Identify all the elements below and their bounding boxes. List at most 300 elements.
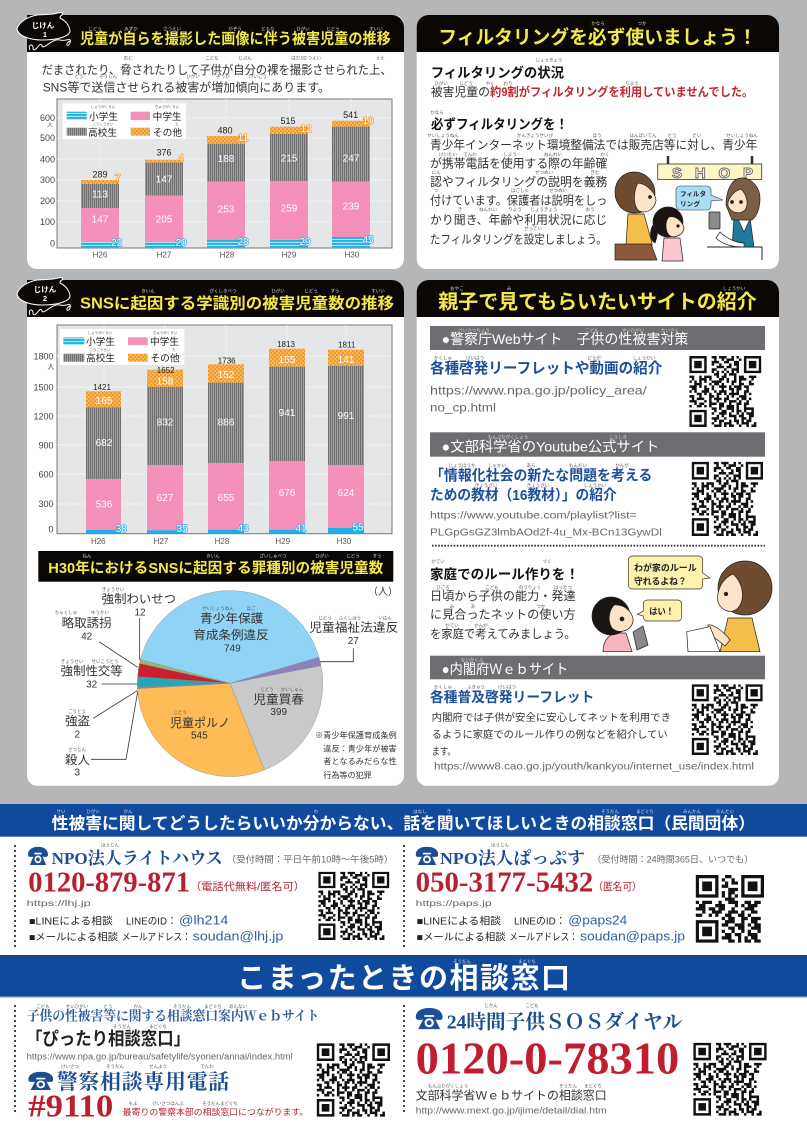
value labels: 259: [281, 204, 298, 214]
text block: be sure to filter: かなら: [430, 109, 444, 116]
legend: しょうがくせい: [88, 330, 113, 336]
section: MEXT YouTube: https://www.youtube.com/playlist?list=: [430, 509, 637, 521]
value labels: 20: [175, 238, 187, 249]
value labels: H28: [215, 537, 230, 546]
text block: be sure to filter: はんばいてん: [630, 132, 657, 139]
section: Cabinet Office: ●内閣府Ｗｅｂサイト: [442, 661, 568, 677]
value labels: H29: [275, 537, 291, 546]
contact: Lighthouse: [27, 842, 393, 944]
heading bar: H30 by crime type: ひがい: [315, 552, 329, 560]
text block: filtering status: 約9割がフィルタリングを利用していませんでした。: [490, 84, 753, 99]
pie chart: victims by crime type: じどう: [173, 709, 187, 716]
band: private consultation: き: [447, 809, 451, 815]
value labels: H30: [345, 250, 360, 260]
bars H26: [81, 180, 119, 248]
band: private consultation: みんかん: [683, 808, 701, 815]
contact: Lighthouse: https://lhj.jp: [27, 898, 91, 908]
pie chart: victims by crime type: 3: [75, 768, 81, 778]
icon: case 2 badge: [17, 278, 70, 315]
heading bar: self-taken images: じどう: [88, 26, 102, 32]
text block: filtering status: [431, 58, 753, 99]
icon: case 2 badge: 2: [43, 294, 47, 303]
value labels: 7: [115, 174, 121, 184]
value labels: 1421: [93, 383, 111, 392]
pie chart: victims by crime type: 青少年保護: [200, 610, 263, 626]
bar chart: self-taken images: 人: [47, 122, 53, 129]
text block: household rules: に見合ったネットの使い方: [430, 607, 576, 622]
pie chart: victims by crime type: ちゃくしゅ: [55, 610, 77, 616]
value labels: 515: [280, 116, 296, 126]
speech bubble: yes: はい！: [649, 606, 674, 616]
heading bar: recommended sites: おやこ: [450, 285, 464, 292]
bar chart: self-taken images: [40, 99, 392, 260]
pie chart: victims by crime type: ふくしほう: [339, 616, 361, 622]
section: National Police Agency: けいさつちょう: [458, 327, 490, 334]
bars H30: [332, 121, 370, 248]
contact: Pittari and police line: まどぐち: [204, 1003, 222, 1010]
text block: filtering status: 被害児童の: [431, 85, 490, 99]
clerk: [709, 178, 760, 247]
legend: ちゅうがくせい: [155, 104, 180, 110]
pie chart: victims by crime type: かいしゅん: [281, 686, 304, 693]
value labels: 991: [338, 411, 355, 422]
QR code: [692, 684, 763, 755]
bars H29: [269, 349, 305, 534]
section: National Police Agency: https://www.npa.go.jp/policy_area/: [430, 384, 647, 398]
QR code: [693, 1043, 767, 1116]
text block: household rules: [430, 558, 579, 641]
pie chart: victims by crime type: 強制性交等: [61, 664, 123, 678]
icon: telephone: [416, 847, 438, 865]
text block: be sure to filter: おう: [586, 206, 594, 213]
heading bar: H30 by crime type: H30年におけるSNSに起因する罪種別の被害児童数: [48, 559, 384, 577]
contact: 24-hour SOS dial: 24時間子供ＳＯＳダイヤル: [447, 1009, 682, 1033]
legend: ちゅうがくせい: [153, 330, 178, 336]
text block: be sure to filter: とう: [668, 133, 676, 139]
pie chart: victims by crime type: 42: [81, 632, 93, 642]
section: National Police Agency: ●警察庁Webサイト 子供の性被害対策: [442, 331, 688, 347]
text block: be sure to filter: かんきょうせいび: [517, 132, 553, 139]
contact: Lighthouse: LINEのID：: [126, 916, 177, 927]
speech bubble: filtering: [676, 186, 723, 210]
text block: be sure to filter: が携帯電話を使用する際の年齢確: [430, 155, 607, 170]
text block: note: ※青少年保護育成条例: [315, 730, 397, 740]
text block: be sure to filter: じょうきょう: [530, 207, 558, 213]
text block: note: 行為等の犯罪: [323, 770, 372, 780]
pie chart: victims by crime type: ほご: [246, 605, 256, 612]
contact: Lighthouse: （電話代無料/匿名可）: [190, 880, 305, 893]
contact: PAPS: soudan@paps.jp: [580, 930, 685, 944]
illustration: parent and child talking: [592, 556, 772, 652]
legend: その他: [153, 127, 182, 139]
legend: こうこうせい: [92, 122, 114, 128]
contact: 24-hour SOS dial: 0120-0-78310: [416, 1032, 679, 1083]
bar chart: self-taken images: 400: [40, 154, 55, 164]
heading bar: H30 by crime type: ねん: [82, 554, 92, 560]
contact: Pittari and police line: せいひがい: [66, 1003, 89, 1010]
pie chart: victims by crime type: 殺人: [65, 752, 90, 767]
section: Cabinet Office: 内閣府では子供が安全に安心してネットを利用でき: [432, 711, 671, 724]
legend: その他: [150, 352, 180, 364]
QR code: [696, 875, 764, 943]
contact: Pittari and police line: せんよう: [149, 1064, 167, 1070]
section: Cabinet Office: 各種普及啓発リーフレット: [430, 689, 594, 705]
text block: household rules: こども: [485, 584, 499, 591]
text block: be sure to filter: 付けています。保護者は説明をしっ: [430, 193, 607, 208]
value labels: 113: [92, 190, 108, 200]
value labels: 239: [343, 202, 360, 212]
heading bar: SNS victims by school level: じどう: [304, 288, 318, 294]
band: private consultation: はなし: [413, 808, 427, 815]
panel: self-taken images trend: [17, 13, 404, 269]
section: National Police Agency: こども: [585, 327, 599, 334]
value labels: H27: [154, 537, 169, 546]
icon: case 1 badge: 1: [43, 30, 47, 39]
text block: be sure to filter: でんわ: [463, 151, 477, 158]
icon: case 2 badge: じけん: [34, 285, 57, 294]
contact: Lighthouse: ■LINEによる相談: [29, 914, 113, 927]
value labels: 28: [237, 237, 249, 248]
contact: 24-hour SOS dial: もんぶかがくしょう: [428, 1082, 468, 1090]
value labels: 1811: [338, 341, 356, 350]
text block: household rules: かんが: [474, 622, 488, 629]
value labels: H26: [91, 537, 106, 546]
text block: intro: とう: [74, 74, 84, 80]
contact: Pittari and police line: もよ: [128, 1101, 138, 1107]
section: MEXT YouTube: かんが: [615, 462, 629, 469]
contact: Lighthouse: 0120-879-871: [28, 868, 190, 899]
pie chart: victims by crime type: きょうせい: [102, 587, 125, 593]
section: Cabinet Office: ふきゅう: [467, 684, 485, 690]
band: when in trouble: まどぐち: [518, 958, 536, 965]
heading bar: self-taken images: すいい: [369, 26, 383, 32]
paper: [687, 627, 720, 652]
contact: Pittari and police line: 子供の性被害等に関する相談窓口案内Ｗｅｂサイト: [27, 1008, 319, 1024]
legend: 高校生: [88, 127, 117, 139]
value labels: 155: [279, 355, 296, 366]
value labels: 11: [238, 133, 249, 144]
icon: telephone: [28, 1072, 53, 1090]
mother: [708, 561, 772, 652]
contact: 24-hour SOS dial: [416, 1002, 767, 1116]
text block: intro: うえ: [376, 56, 385, 62]
bars H27: [145, 160, 183, 248]
text block: be sure to filter: たフィルタリングを設定しましょう。: [430, 232, 607, 246]
value labels: 1652: [157, 366, 175, 375]
contact: PAPS: ■LINEによる相談: [417, 914, 501, 927]
text block: be sure to filter: けいたい: [439, 152, 457, 158]
text block: be sure to filter: つ: [434, 188, 439, 194]
value labels: 29: [299, 237, 311, 248]
pie chart: victims by crime type: 児童買春: [253, 692, 304, 706]
text block: be sure to filter: ねんれい: [544, 152, 562, 158]
section: MEXT YouTube: ための教材（16教材）」の紹介: [430, 487, 617, 504]
speech bubble: filtering: フィルタ: [680, 189, 706, 198]
value labels: 480: [217, 126, 233, 136]
heading bar: self-taken images: ともな: [261, 26, 275, 32]
heading bar: filtering: フィルタリングを必ず使いましょう！: [438, 26, 757, 48]
contact: Lighthouse: @lh214: [179, 913, 228, 927]
value labels: 43: [237, 524, 249, 534]
QR code: [692, 462, 763, 536]
value labels: 253: [218, 204, 235, 216]
heading bar: filtering: [417, 15, 779, 52]
value labels: 141: [338, 355, 355, 366]
section: National Police Agency: no_cp.html: [430, 401, 496, 415]
contact: 24-hour SOS dial: http://www.mext.go.jp/ijime/detail/dial.htm: [416, 1106, 607, 1116]
contact: Lighthouse: ほうじん: [101, 842, 119, 848]
heading bar: filtering: つか: [638, 20, 647, 27]
section: MEXT YouTube: しゃかい: [488, 462, 506, 469]
text block: household rules: づく: [542, 558, 552, 565]
icon: case 1 badge: じけん: [32, 21, 55, 30]
section: MEXT YouTube: きょうざい: [527, 482, 550, 489]
section: Cabinet Office: るように家庭でのルール作りの例などを紹介してい: [432, 728, 668, 741]
contact: Lighthouse: NPO法人ライトハウス: [52, 849, 223, 868]
text block: intro: だまされたり、脅されたりして子供が自分の裸を撮影させられた上、: [42, 62, 392, 77]
bar chart: self-taken images: 100: [40, 217, 55, 227]
bar chart: self-taken images: 0: [50, 238, 55, 248]
value labels: 682: [96, 438, 113, 449]
heading bar: SNS victims by school level: ひがい: [271, 288, 285, 294]
bars H29: [270, 127, 308, 248]
section: MEXT YouTube: こうしき: [609, 434, 627, 440]
heading bar: H30 by crime type: じどう: [346, 552, 360, 560]
contact: Pittari and police line: そうだん: [173, 1003, 191, 1010]
text block: intro: おど: [124, 54, 133, 62]
pie chart: victims by crime type: いはん: [378, 616, 392, 622]
value labels: [91, 340, 364, 546]
band: private consultation: わ: [314, 808, 319, 815]
text block: note: 者となるみだらな性: [323, 756, 397, 766]
bar chart: SNS victims by school level: 300: [38, 499, 54, 509]
bar chart: self-taken images: 300: [40, 175, 55, 185]
heading bar: SNS victims by school level: すいい: [371, 288, 385, 294]
legend: [63, 103, 186, 139]
pie chart: victims by crime type: 749: [224, 644, 241, 654]
value labels: 38: [116, 524, 127, 535]
value labels: 832: [157, 418, 174, 428]
heading bar: H30 by crime type: ざいしゅべつ: [260, 552, 287, 560]
pie chart: victims by crime type: じどう: [260, 686, 274, 693]
heading bar: self-taken images: ひがい: [296, 26, 310, 32]
legend: こうこうせい: [90, 347, 111, 353]
text block: household rules: を家庭で考えてみましょう。: [430, 627, 576, 641]
pie chart: victims by crime type: 545: [191, 730, 208, 742]
bar chart: self-taken images: 500: [40, 133, 55, 143]
text block: be sure to filter: たい: [692, 133, 702, 139]
pie chart: victims by crime type: 児童ポルノ: [170, 716, 230, 730]
contact: 24-hour SOS dial: まどぐち: [584, 1082, 602, 1090]
pie chart: victims by crime type: じどう: [318, 614, 332, 622]
value labels: 45: [362, 235, 374, 246]
contact: 24-hour SOS dial: こども: [525, 1002, 539, 1009]
text block: be sure to filter: 青少年インターネット環境整備法では販売店等に対し、青少年: [430, 137, 757, 152]
legend: 小学生: [86, 336, 115, 348]
text block: intro: こども: [205, 54, 219, 62]
text block: household rules: あ: [471, 604, 476, 610]
pie chart: victims by crime type: 強制わいせつ: [102, 592, 176, 606]
heading bar: SNS victims by school level: [27, 280, 404, 317]
icon: telephone: [416, 1008, 443, 1029]
pie chart: victims by crime type: せいこうとう: [92, 659, 118, 665]
value labels: 10: [362, 116, 374, 127]
value labels: 289: [92, 170, 108, 180]
value labels: 147: [92, 214, 109, 226]
value labels: 655: [218, 493, 235, 504]
pie chart: victims by crime type: 12: [134, 608, 146, 618]
section: National Police Agency: どうが: [587, 354, 601, 362]
text block: intro: けいこう: [249, 74, 267, 80]
text block: household rules: のうりょく: [519, 585, 541, 591]
contact: Pittari and police line: こども: [36, 1003, 50, 1010]
value labels: 627: [157, 493, 174, 504]
text block: be sure to filter: せいしょうねん: [726, 133, 758, 139]
contact: Pittari and police line: [26, 1003, 390, 1124]
contact: PAPS: メールアドレス：: [509, 933, 578, 944]
QR code: [318, 872, 389, 940]
text block: household rules: かてい: [431, 558, 445, 565]
section: MEXT YouTube: じょうほうか: [448, 462, 476, 469]
section: National Police Agency: [430, 326, 765, 427]
heading bar: filtering: かなら: [591, 20, 605, 27]
band: private consultation: そうだん: [601, 808, 619, 815]
value labels: H27: [157, 250, 172, 260]
icon: telephone: [28, 847, 48, 865]
heading bar: SNS victims by school level: がくしきべつ: [210, 288, 237, 294]
contact: PAPS: @paps24: [568, 913, 627, 927]
text block: filtering status: りよう: [625, 81, 639, 87]
pie chart: victims by crime type: きょうせい: [61, 659, 84, 665]
text block: intro: さつえい: [303, 54, 321, 62]
heading bar: H30 by crime type: すう: [372, 552, 382, 560]
section: Cabinet Office: けいはつ: [498, 684, 516, 690]
section: National Police Agency: せいひがい: [622, 327, 645, 334]
value labels: [92, 110, 374, 260]
contact: Lighthouse: soudan@lhj.jp: [193, 930, 283, 944]
text block: be sure to filter: 必ずフィルタリングを！: [431, 116, 568, 132]
section: MEXT YouTube: [430, 432, 765, 539]
contact: PAPS: 050-3177-5432: [416, 868, 593, 899]
speech bubble: filtering: リング: [680, 199, 701, 208]
section: Cabinet Office: [430, 656, 765, 772]
speech bubble: yes: [637, 600, 682, 621]
girl: [651, 207, 684, 261]
section: National Police Agency: けいはつ: [466, 356, 484, 362]
text block: be sure to filter: かく: [600, 151, 610, 158]
contact: Pittari and police line: 「ぴったり相談窓口」: [26, 1029, 190, 1049]
legend: 中学生: [153, 111, 182, 123]
value labels: 215: [281, 154, 298, 164]
text block: be sure to filter: 認やフィルタリングの説明を義務: [430, 174, 607, 189]
contact: PAPS: ■メールによる相談: [417, 931, 506, 944]
heading bar: self-taken images: [27, 15, 404, 52]
section: National Police Agency: かくしゅ: [434, 354, 452, 362]
section: National Police Agency: たいさく: [661, 327, 679, 334]
band: private consultation: かん: [124, 808, 133, 815]
contact: PAPS: LINEのID：: [514, 916, 566, 927]
value labels: H28: [220, 250, 235, 260]
value labels: 41: [295, 524, 307, 534]
contact: Pittari and police line: #9110: [28, 1088, 113, 1124]
value labels: 941: [279, 408, 296, 419]
text block: intro: SNS等で送信させられる被害が増加傾向にあります。: [43, 80, 330, 94]
contact: Pittari and police line: そうだんまどぐち: [202, 1100, 238, 1107]
band: private consultation: 性被害に関してどうしたらいいか分からない、話を聞いてほしいときの相談窓口（民間団体）: [52, 814, 755, 833]
text block: note: [315, 730, 397, 780]
bar chart: SNS victims by school level: [33, 325, 392, 546]
text block: be sure to filter: りよう: [508, 207, 522, 213]
legend: しょうがくせい: [91, 104, 116, 110]
QR code: [689, 356, 761, 427]
section: National Police Agency: しょうかい: [633, 354, 656, 362]
heading bar: recommended sites: しょうかい: [723, 285, 746, 292]
speech bubble: house rules: わが家のルール: [634, 562, 697, 573]
contact: PAPS: ほうじん: [491, 842, 509, 848]
legend: 高校生: [86, 352, 115, 364]
heading bar: H30 by crime type: きいん: [206, 554, 220, 560]
text block: be sure to filter: かり聞き、年齢や利用状況に応じ: [430, 212, 607, 227]
speech bubble: house rules: [628, 556, 710, 589]
pie chart: victims by crime type: 育成条例違反: [193, 627, 269, 642]
text block: filtering status: やく: [486, 80, 494, 87]
contact: Pittari and police line: そうだん: [113, 1023, 131, 1030]
heading bar: H30 by crime type: [38, 551, 393, 582]
text block: household rules: 日頃から子供の能力・発達: [430, 589, 576, 603]
section: MEXT YouTube: 「情報化社会の新たな問題を考える: [430, 466, 652, 484]
illustration: shop filtering explanation: SHOP: [672, 165, 753, 182]
QR code: [317, 1043, 390, 1117]
value labels: H30: [337, 537, 352, 546]
heading bar: self-taken images: みずか: [124, 26, 138, 32]
contact: PAPS: （受付時間：24時間365日、いつでも）: [592, 853, 753, 864]
pie chart: victims by crime type: 2: [75, 730, 81, 740]
value labels: 541: [343, 110, 358, 120]
child: [592, 597, 648, 652]
contact: Pittari and police line: まどぐち: [149, 1023, 167, 1030]
value labels: 4: [178, 154, 184, 164]
band: when in trouble: そうだん: [453, 958, 471, 965]
value labels: 886: [218, 418, 235, 428]
band: private consultation: だんたい: [716, 809, 734, 815]
text block: be sure to filter: [427, 109, 758, 246]
text block: be sure to filter: ほごしゃ: [511, 187, 529, 194]
bars H26: [86, 391, 121, 534]
band: when in trouble: [0, 955, 807, 1138]
text block: be sure to filter: き: [458, 207, 462, 213]
legend: [60, 329, 184, 365]
text block: filtering status: わり: [504, 80, 512, 87]
text block: filtering status: じどう: [459, 80, 473, 87]
contact: Pittari and police line: あんない: [229, 1003, 247, 1010]
heading bar: SNS victims by school level: すう: [330, 288, 340, 294]
band: private consultation: ひがい: [86, 808, 100, 815]
text block: be sure to filter: ほう: [592, 133, 602, 139]
value labels: 158: [157, 376, 174, 388]
text block: be sure to filter: せつめい: [535, 170, 553, 176]
value labels: 536: [96, 500, 113, 510]
value labels: 376: [156, 148, 172, 158]
pie chart: victims by crime type: 児童福祉法違反: [309, 620, 398, 634]
heading bar: recommended sites: 親子で見てもらいたいサイトの紹介: [438, 291, 757, 314]
section: MEXT YouTube: しょうかい: [584, 482, 607, 489]
contact: PAPS: [416, 842, 764, 944]
bar chart: SNS victims by school level: 1200: [33, 412, 54, 422]
contact: Pittari and police line: けいさつほんぶ: [152, 1100, 184, 1107]
pie chart: victims by crime type: ゆうかい: [91, 609, 109, 616]
text block: intro: ぞうか: [216, 73, 230, 80]
band: private consultation: [0, 804, 807, 955]
